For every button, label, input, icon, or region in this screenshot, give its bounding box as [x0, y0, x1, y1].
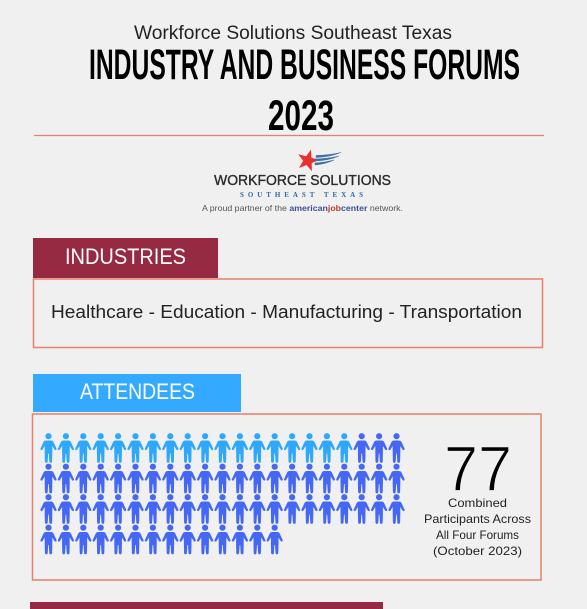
stat caption: (October 2023)	[433, 544, 522, 558]
title	[89, 41, 520, 140]
logo: Workforce Solutions Southeast Texas: WORKFORCE SOLUTIONS	[214, 173, 391, 189]
title: 2023	[268, 92, 334, 140]
subtitle: Workforce Solutions Southeast Texas	[134, 23, 452, 44]
logo: Workforce Solutions Southeast Texas: A proud partner of the americanjobcenter network.	[202, 203, 403, 213]
stat caption: Combined	[448, 496, 507, 510]
heading: attendees	[33, 374, 241, 412]
stat caption	[424, 496, 531, 558]
stat caption: All Four Forums	[436, 528, 519, 542]
icon: red star with stripes	[298, 150, 341, 171]
panel: attendees	[32, 374, 541, 580]
next section heading bar	[30, 602, 383, 609]
logo: Workforce Solutions Southeast Texas	[202, 150, 403, 213]
logo: Workforce Solutions Southeast Texas: SOUTHEAST TEXAS	[240, 191, 363, 199]
industries list: Healthcare - Education - Manufacturing - Transportation	[51, 302, 522, 322]
heading: attendees: ATTENDEES	[80, 379, 195, 404]
stat caption: Participants Across	[424, 512, 531, 526]
pictogram: 77 participants	[40, 433, 405, 554]
stat: 77: 77	[444, 433, 512, 505]
heading: industries	[33, 238, 218, 278]
panel: industries	[33, 238, 542, 348]
heading: industries: INDUSTRIES	[65, 244, 186, 269]
